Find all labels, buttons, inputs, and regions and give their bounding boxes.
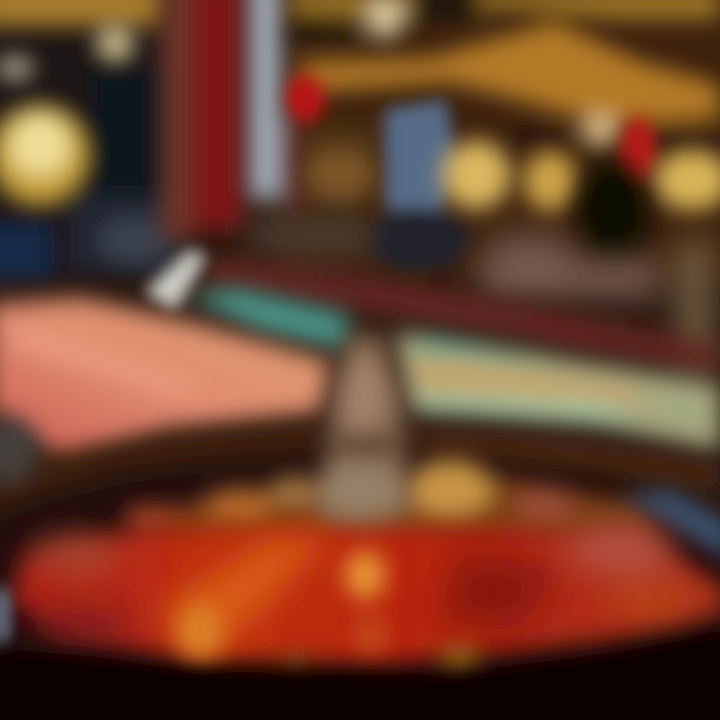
icon: pale curtain stripe xyxy=(250,0,306,210)
panel: wheel gold ring xyxy=(124,460,660,545)
icon: glowing wheel markers xyxy=(176,551,480,670)
icon: glowing lamps xyxy=(305,141,720,211)
icon: red curtain xyxy=(160,0,244,240)
panel: wheel pockets xyxy=(25,528,700,645)
panel: salmon felt xyxy=(0,298,330,458)
icon: white marker xyxy=(145,250,206,310)
panel: near table rim xyxy=(0,424,720,515)
panel: black foreground xyxy=(0,628,720,720)
icon: blue wheel edge xyxy=(620,492,720,560)
icon: gold lights upper left xyxy=(0,0,173,264)
icon: red figure left xyxy=(285,74,325,122)
panel: far table rail xyxy=(200,258,720,372)
panel: pale green felt xyxy=(395,332,720,450)
icon: blue-shirted figure xyxy=(366,100,470,272)
panel: grey table edge left xyxy=(0,416,38,484)
panel: teal felt xyxy=(185,288,350,350)
icon: pale left edge xyxy=(0,590,8,640)
panel: wheel base shadow xyxy=(0,458,720,720)
panel: golden balconies upper right xyxy=(290,0,720,195)
icon: red figure right xyxy=(620,116,656,184)
icon: seated crowd xyxy=(250,215,710,370)
panel: red wheel xyxy=(10,525,720,662)
icon: wheel centre turret xyxy=(316,335,410,522)
icon: dark figure right xyxy=(576,162,648,262)
panel: upper hall background xyxy=(0,0,720,280)
